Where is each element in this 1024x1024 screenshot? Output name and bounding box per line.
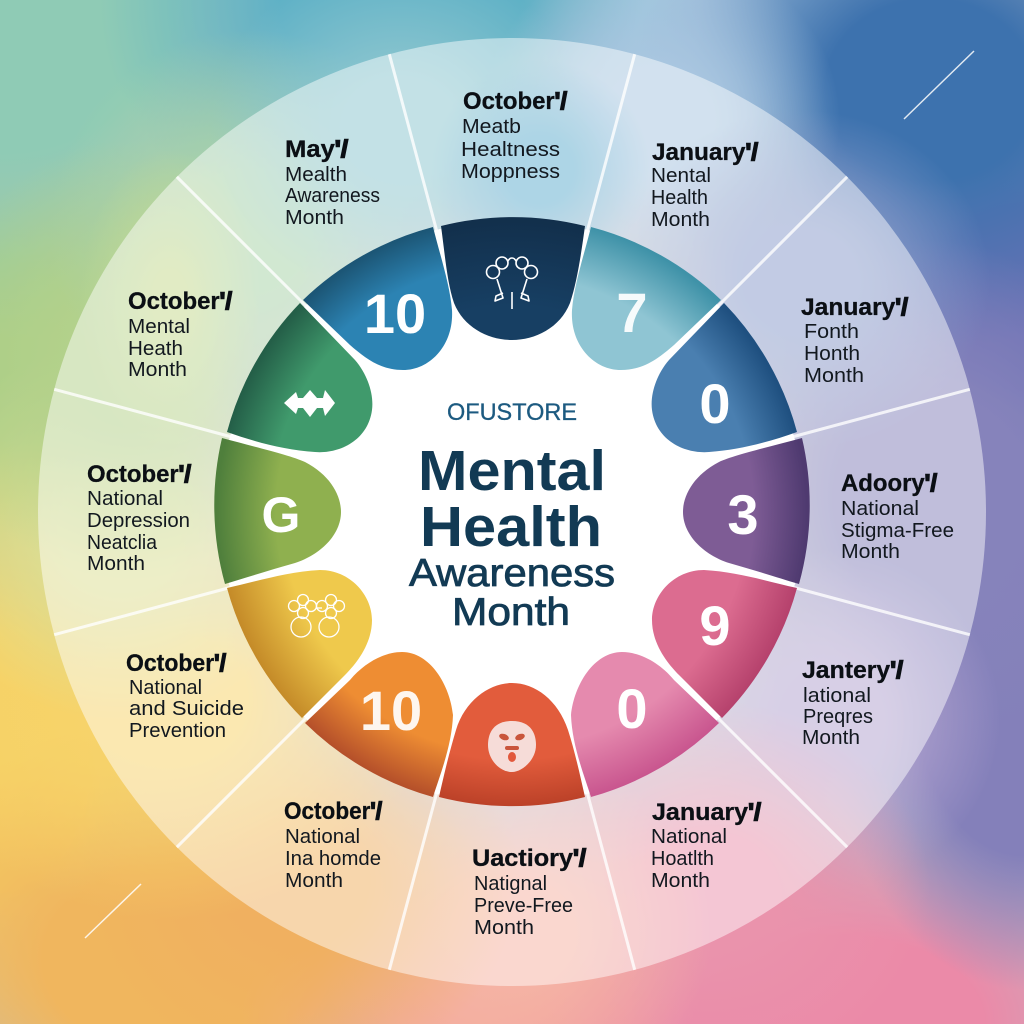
label: top (461, 88, 567, 183)
label: 240 degrees: October'/ (126, 650, 226, 677)
label: 240 degrees: Prevention (129, 720, 226, 742)
label: 60 degrees (801, 294, 908, 387)
label: 300 degrees: Heath (128, 338, 183, 360)
label: bottom: Month (474, 917, 534, 939)
label: 330 degrees (285, 136, 380, 229)
label: 120 degrees: lational (803, 685, 871, 707)
label: 300 degrees (128, 288, 232, 381)
icon: face (488, 721, 536, 772)
central title block (409, 399, 615, 634)
label: 270 degrees: National (87, 488, 163, 510)
label: 300 degrees: October'/ (128, 288, 232, 315)
petal: lime with letter G (214, 438, 341, 584)
decorative accent line top right (904, 51, 974, 119)
label: 330 degrees: May'/ (285, 136, 348, 163)
title: Month: Month (452, 591, 570, 634)
number 10: 10 (364, 282, 426, 345)
label: 210 degrees: Ina homde (285, 848, 381, 870)
label: 270 degrees (87, 461, 191, 575)
label: bottom: Natignal (474, 873, 547, 895)
label: 300 degrees: Mental (128, 316, 190, 338)
petal: pink 0 (571, 652, 719, 797)
label: 30 degrees (651, 139, 758, 231)
label: 240 degrees: and Suicide (129, 698, 244, 720)
label: 300 degrees: Month (128, 359, 187, 381)
label: bottom (472, 845, 586, 939)
label: 60 degrees: Fonth (804, 321, 859, 343)
label: 330 degrees: Awareness (285, 185, 380, 207)
label: 90 degrees: National (841, 498, 919, 520)
label: 120 degrees (802, 657, 903, 749)
label: 150 degrees: National (651, 826, 727, 848)
label: bottom: Uactiory'/ (472, 845, 586, 872)
label: 240 degrees (126, 650, 244, 742)
label: 60 degrees: Honth (804, 343, 860, 365)
petal: teal 7 (572, 227, 721, 370)
number 0: 0 (699, 372, 731, 435)
label: 90 degrees: Month (841, 541, 900, 563)
icon: arrows (284, 390, 335, 417)
petal: steel blue 0 (652, 303, 797, 452)
label: 120 degrees: Month (802, 727, 860, 749)
label: 150 degrees: Hoatlth (651, 848, 714, 870)
petal: purple 3 (683, 438, 810, 584)
label: 120 degrees: Jantery'/ (802, 657, 903, 684)
label: top: October'/ (463, 88, 567, 115)
label: top: Moppness (461, 161, 560, 183)
label: 150 degrees: Month (651, 870, 710, 892)
kicker: OFUSTORE (447, 399, 577, 426)
label: bottom: Preve-Free (474, 895, 573, 917)
petal: green with arrows icon (227, 303, 372, 452)
number 7: 7 (616, 281, 648, 344)
label: 210 degrees: October'/ (284, 798, 382, 825)
title: Awareness: Awareness (409, 552, 615, 595)
letter G: G (262, 487, 300, 543)
title: Health: Health (420, 495, 602, 559)
label: 270 degrees: Month (87, 553, 145, 575)
label: 30 degrees: Health (651, 187, 708, 209)
icon: brain figure (486, 257, 538, 309)
petal: blue 10 (303, 227, 452, 370)
label: 150 degrees: January'/ (652, 799, 761, 826)
label: 30 degrees: Month (651, 209, 710, 231)
label: 30 degrees: Nental (651, 165, 711, 187)
number 0: 0 (616, 677, 648, 740)
label: 120 degrees: Preqres (803, 706, 873, 728)
label: 210 degrees (284, 798, 382, 892)
icon: twin flowers (288, 594, 344, 637)
petal: yellow with flowers icon (227, 570, 372, 718)
label: top: Meatb (462, 116, 521, 138)
label: 90 degrees: Adoory'/ (841, 470, 937, 497)
label: 270 degrees: October'/ (87, 461, 191, 488)
label: 150 degrees (651, 799, 761, 892)
label: 330 degrees: Mealth (285, 164, 347, 186)
number 9: 9 (699, 594, 731, 657)
petal: orange 10 (305, 652, 453, 797)
label: 240 degrees: National (129, 677, 202, 699)
label: 90 degrees (841, 470, 954, 563)
label: 210 degrees: Month (285, 870, 343, 892)
white centre disc (220, 220, 804, 804)
label: 60 degrees: Month (804, 365, 864, 387)
label: 270 degrees: Depression (87, 510, 190, 532)
label: 330 degrees: Month (285, 207, 344, 229)
number 3: 3 (727, 483, 759, 546)
label: 270 degrees: Neatclia (87, 532, 158, 554)
petal: rose 9 (652, 570, 797, 718)
label: top: Healtness (461, 139, 560, 161)
petal: navy with brain icon (441, 217, 585, 340)
label: 210 degrees: National (285, 826, 360, 848)
label: 30 degrees: January'/ (652, 139, 758, 166)
title: Mental: Mental (418, 439, 606, 503)
label: 60 degrees: January'/ (801, 294, 908, 321)
label: 90 degrees: Stigma-Free (841, 520, 954, 542)
petal: red with face icon (439, 683, 585, 806)
number 10: 10 (360, 679, 422, 742)
decorative accent line bottom left (85, 884, 141, 938)
